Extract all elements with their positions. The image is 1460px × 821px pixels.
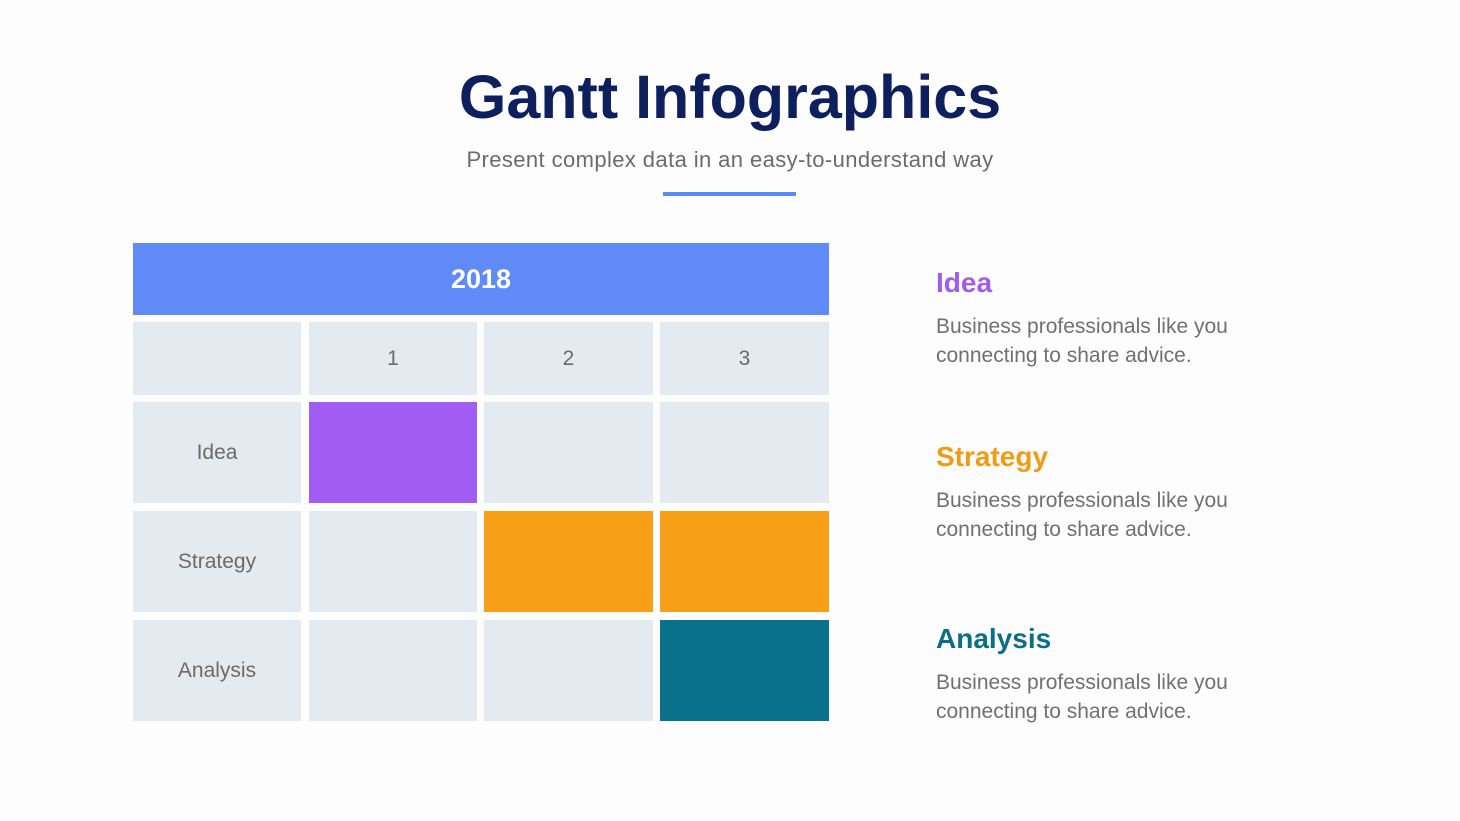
bar: strategy [484,511,829,612]
header year [133,243,829,315]
row: Idea: Idea [197,440,237,464]
row: Analysis [133,620,301,721]
legend: Strategy: Business professionals like you connecting to share advice. [936,489,1228,541]
column 3 [660,322,829,395]
legend: Strategy: Strategy [936,441,1048,472]
column 3: 3 [739,346,750,370]
subtitle: Present complex data in an easy-to-understand way [466,147,994,172]
legend: Idea [936,267,1228,367]
legend: Idea: Idea [936,267,992,298]
header year: 2018 [451,264,511,294]
title: Gantt Infographics [459,63,1001,131]
row: Strategy: Strategy [178,550,256,572]
column 2: 2 [563,346,574,370]
column 1 [309,322,477,395]
legend: Idea: Business professionals like you connecting to share advice. [936,315,1228,367]
row: Analysis: Analysis [178,658,256,682]
row: Strategy [133,511,301,612]
bar: idea [309,402,477,503]
legend: Analysis: Business professionals like you connecting to share advice. [936,671,1228,723]
column 2 [484,322,653,395]
bar: analysis [660,620,829,721]
legend: Analysis [936,623,1228,723]
legend: Strategy [936,441,1228,541]
legend: Analysis: Analysis [936,623,1051,654]
gantt chart [133,243,829,721]
underline accent [663,192,796,196]
row: Idea [133,402,301,503]
column 1: 1 [387,346,399,370]
